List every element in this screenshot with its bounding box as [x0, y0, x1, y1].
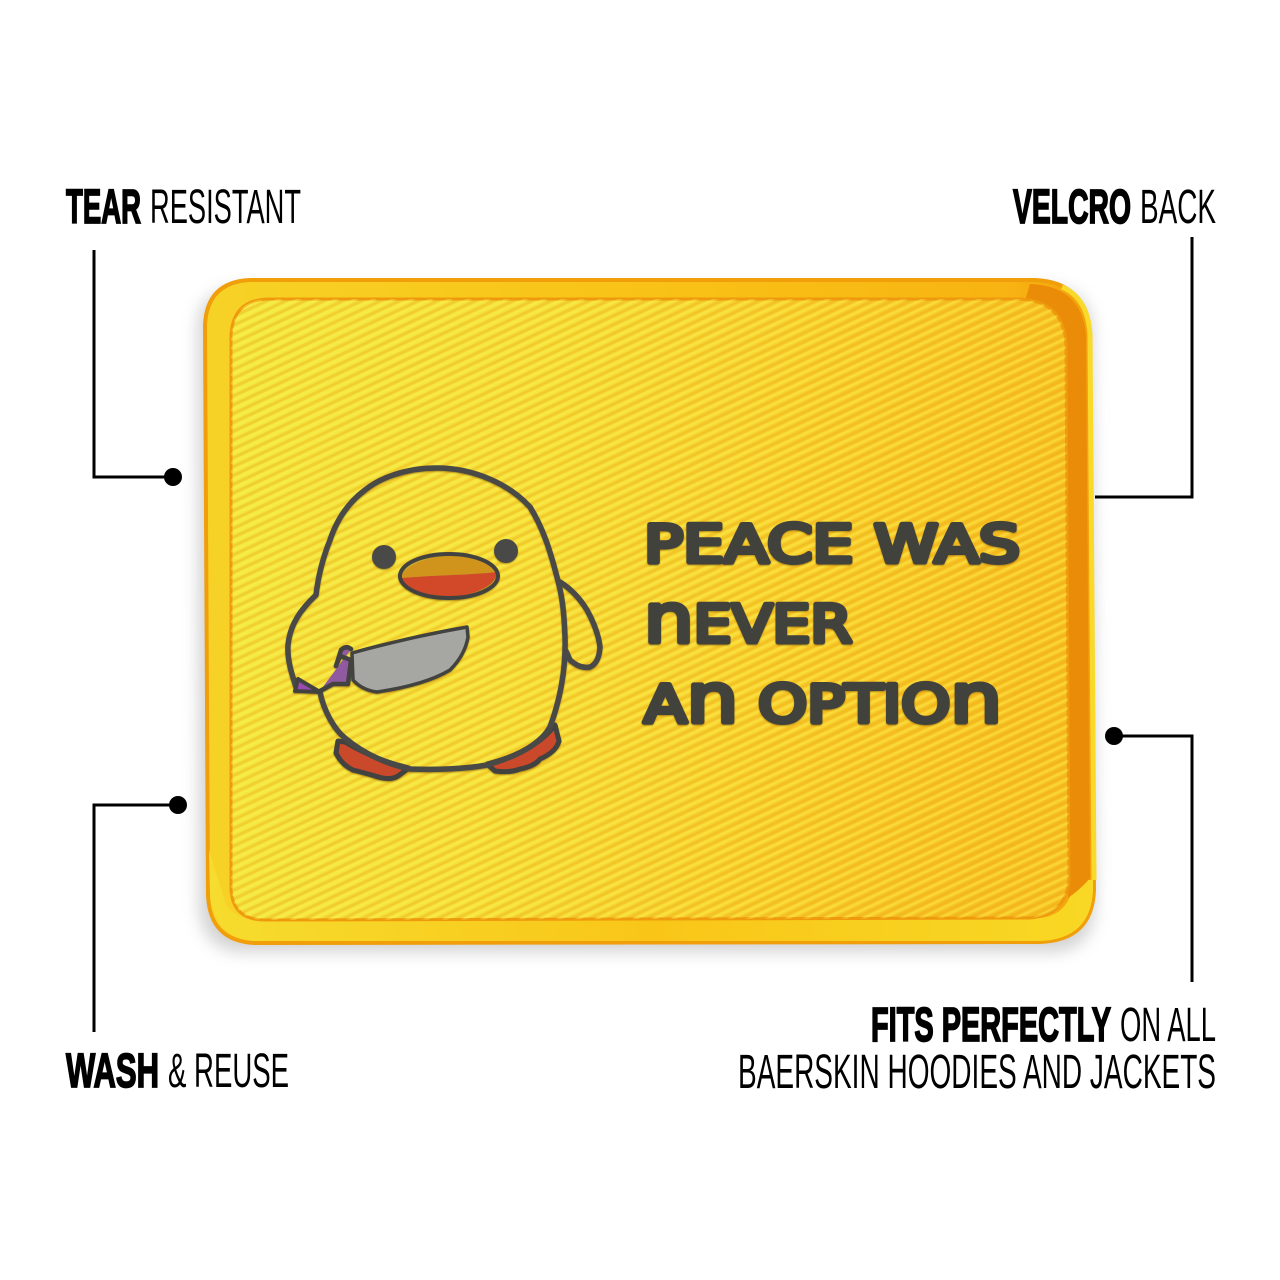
- callout: velcro back: [1013, 181, 1216, 497]
- slogan line 2: nEVER: [644, 580, 852, 659]
- callout: wash and reuse: [66, 796, 289, 1098]
- label: VELCRO: [1013, 181, 1131, 234]
- dot: [164, 468, 182, 486]
- patch bottom rim: [209, 850, 1093, 941]
- label: WASH: [66, 1045, 159, 1098]
- label: [66, 1045, 289, 1098]
- callout: fits perfectly: [738, 727, 1216, 1099]
- patch twill field: [231, 299, 1069, 920]
- label: RESISTANT: [150, 181, 301, 234]
- beak upper: [401, 555, 497, 578]
- duck beak: [400, 554, 498, 598]
- label: & REUSE: [168, 1045, 289, 1098]
- patch right rim: [1025, 284, 1090, 898]
- embroidered slogan: [644, 515, 1020, 739]
- patch: [198, 278, 1096, 952]
- beak lower: [401, 572, 497, 598]
- leader line: [94, 250, 173, 477]
- label: [738, 999, 1216, 1099]
- beak outline: [400, 554, 498, 598]
- icon: duck with knife: [288, 468, 600, 778]
- label: [66, 181, 301, 234]
- callout: tear resistant: [66, 181, 301, 486]
- duck arm: [560, 582, 600, 667]
- duck right eye: [494, 539, 518, 563]
- dot: [169, 796, 187, 814]
- duck body outline: [288, 468, 565, 769]
- duck left eye: [372, 545, 396, 569]
- patch shadow: [198, 288, 1095, 952]
- label: BACK: [1140, 181, 1216, 234]
- duck feet: [336, 741, 409, 778]
- knife blade: [352, 627, 468, 692]
- leader line: [1114, 736, 1192, 982]
- slogan line 3: An OPTIO n: [644, 660, 1002, 739]
- label: FITS PERFECTLY: [871, 999, 1111, 1052]
- dot: [1105, 727, 1123, 745]
- patch right edge highlight: [1062, 287, 1094, 880]
- label: TEAR: [66, 181, 141, 234]
- slogan line 1: PEACE WAS: [644, 515, 1020, 575]
- duck left hand: [295, 679, 320, 692]
- patch outer rim: [203, 278, 1096, 945]
- knife handle: [320, 647, 351, 691]
- leader line: [1095, 237, 1192, 497]
- leader line: [94, 805, 178, 1032]
